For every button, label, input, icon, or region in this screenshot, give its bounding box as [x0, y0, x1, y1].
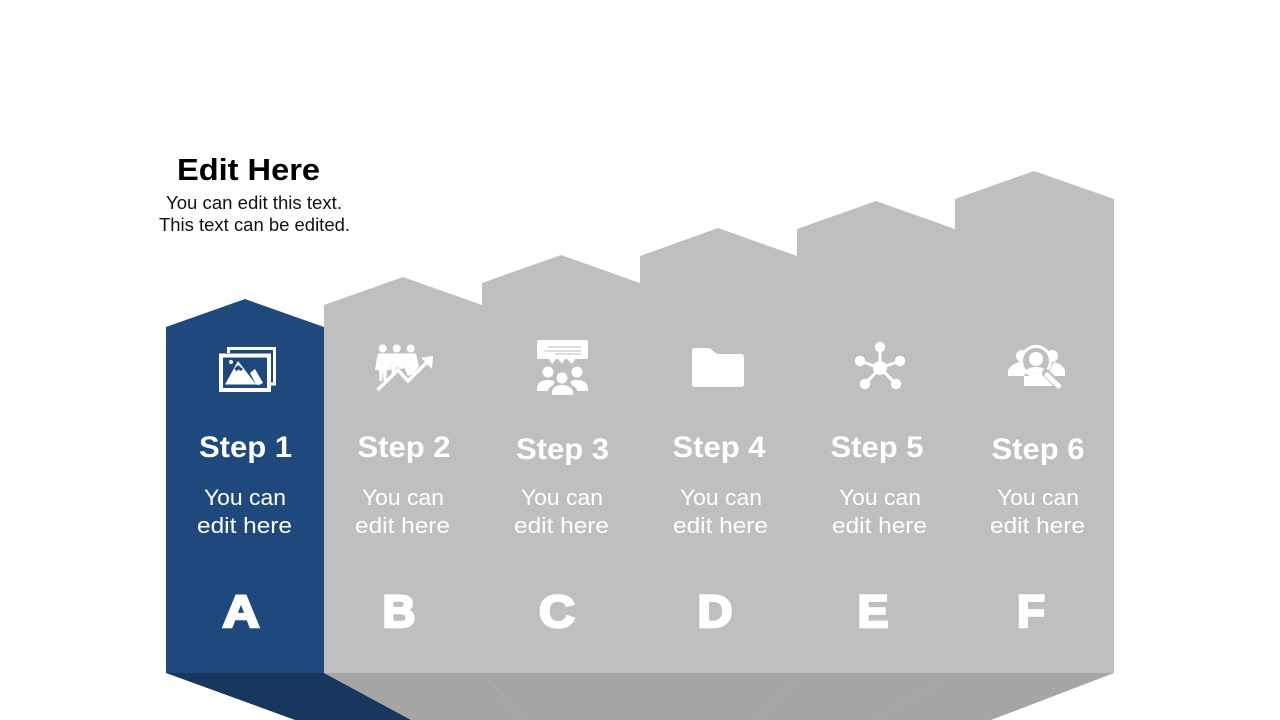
icon: folder — [692, 348, 744, 387]
text: edit here — [832, 513, 927, 538]
bubble lines — [544, 347, 581, 354]
arrow head — [421, 356, 433, 369]
heading: Step 3 — [516, 433, 609, 466]
icon: people search — [1008, 346, 1065, 386]
shoulders left — [537, 380, 554, 391]
text: edit here — [514, 513, 609, 538]
node left — [855, 356, 865, 366]
sun — [229, 360, 233, 364]
hub — [873, 361, 887, 375]
3D base floor — [166, 673, 1114, 720]
floor: grey — [324, 673, 1114, 720]
text: edit here — [673, 513, 768, 538]
handle — [1047, 375, 1058, 386]
icon: team growth — [375, 344, 433, 390]
spoke right — [880, 361, 900, 368]
letter: C — [539, 586, 575, 637]
heading: Step 4 — [672, 431, 766, 464]
panel: step 3 — [482, 255, 640, 673]
letter: F — [1017, 586, 1045, 637]
shoulders centre — [552, 385, 573, 395]
panel shape C — [482, 255, 640, 673]
shoulders bottom — [1024, 376, 1053, 386]
person 3 body — [402, 354, 419, 376]
shoulders right — [1049, 362, 1065, 376]
text: edit here — [990, 513, 1085, 538]
heading: Step 2 — [358, 431, 450, 464]
node lower left — [860, 379, 870, 389]
front frame — [221, 356, 269, 390]
text: You can — [521, 485, 603, 510]
panel: step 5 — [797, 201, 955, 673]
heading: Step 1 — [199, 431, 292, 464]
panel: step 6 — [955, 171, 1114, 673]
speech bubble — [537, 340, 588, 364]
icon: discussion group — [537, 340, 588, 395]
person right — [1046, 350, 1058, 362]
line 1 — [548, 346, 581, 348]
lens ring — [1022, 346, 1050, 376]
panel shape D — [640, 228, 797, 673]
handle outline — [1046, 373, 1059, 386]
heading: Step 5 — [830, 431, 924, 464]
person left — [542, 366, 554, 378]
icon: pictures — [221, 348, 274, 390]
letter: B — [382, 586, 416, 637]
connectors — [860, 347, 900, 384]
subtitle line 1: You can edit this text. — [166, 192, 342, 213]
text: You can — [997, 485, 1079, 510]
person centre body — [1026, 367, 1046, 374]
panel shape E — [797, 201, 955, 673]
text: You can — [204, 485, 286, 510]
seam 3 — [872, 673, 957, 720]
heads — [379, 344, 415, 352]
text: You can — [680, 485, 762, 510]
seam 2 — [756, 673, 800, 720]
spoke left — [860, 361, 880, 368]
text: edit here — [197, 513, 292, 538]
arrow line — [378, 360, 429, 390]
icon: network — [855, 342, 905, 389]
person 2 body — [388, 354, 404, 375]
subtitle line 2: This text can be edited. — [159, 214, 350, 235]
panel shape B — [324, 277, 482, 673]
line 3 — [555, 353, 581, 355]
text: edit here — [355, 513, 450, 538]
back frame — [228, 348, 274, 384]
letter: A — [222, 586, 260, 637]
panel: step 4 — [640, 228, 797, 673]
head 1 — [379, 344, 387, 352]
spoke lower right — [880, 368, 896, 384]
floor: navy — [166, 673, 411, 720]
person centre — [556, 372, 568, 384]
text: You can — [362, 485, 444, 510]
letter: D — [698, 586, 732, 637]
head 3 — [407, 344, 415, 352]
person left — [1016, 350, 1028, 362]
heading: Step 6 — [992, 433, 1084, 466]
node top — [875, 342, 885, 352]
heading block — [159, 152, 350, 235]
panel shape F — [955, 171, 1114, 673]
panel: step 2 — [324, 277, 482, 673]
floor seams — [483, 673, 957, 720]
panel shape A — [166, 299, 324, 673]
mountains — [225, 361, 263, 385]
person centre head — [1029, 352, 1043, 366]
shoulders right — [571, 380, 588, 391]
spoke lower left — [865, 368, 880, 384]
head 2 — [393, 344, 401, 352]
node lower right — [891, 379, 901, 389]
text: You can — [839, 485, 921, 510]
seam 1 — [483, 673, 523, 720]
line 2 — [544, 350, 581, 352]
title: Edit Here — [177, 152, 320, 187]
shoulders left — [1008, 362, 1026, 376]
letter: E — [858, 586, 888, 637]
panel: step 1 — [166, 299, 324, 673]
person right — [572, 366, 582, 378]
node right — [895, 356, 905, 366]
snow cap — [234, 365, 243, 372]
spoke top — [878, 347, 882, 368]
person 1 body — [375, 354, 391, 381]
